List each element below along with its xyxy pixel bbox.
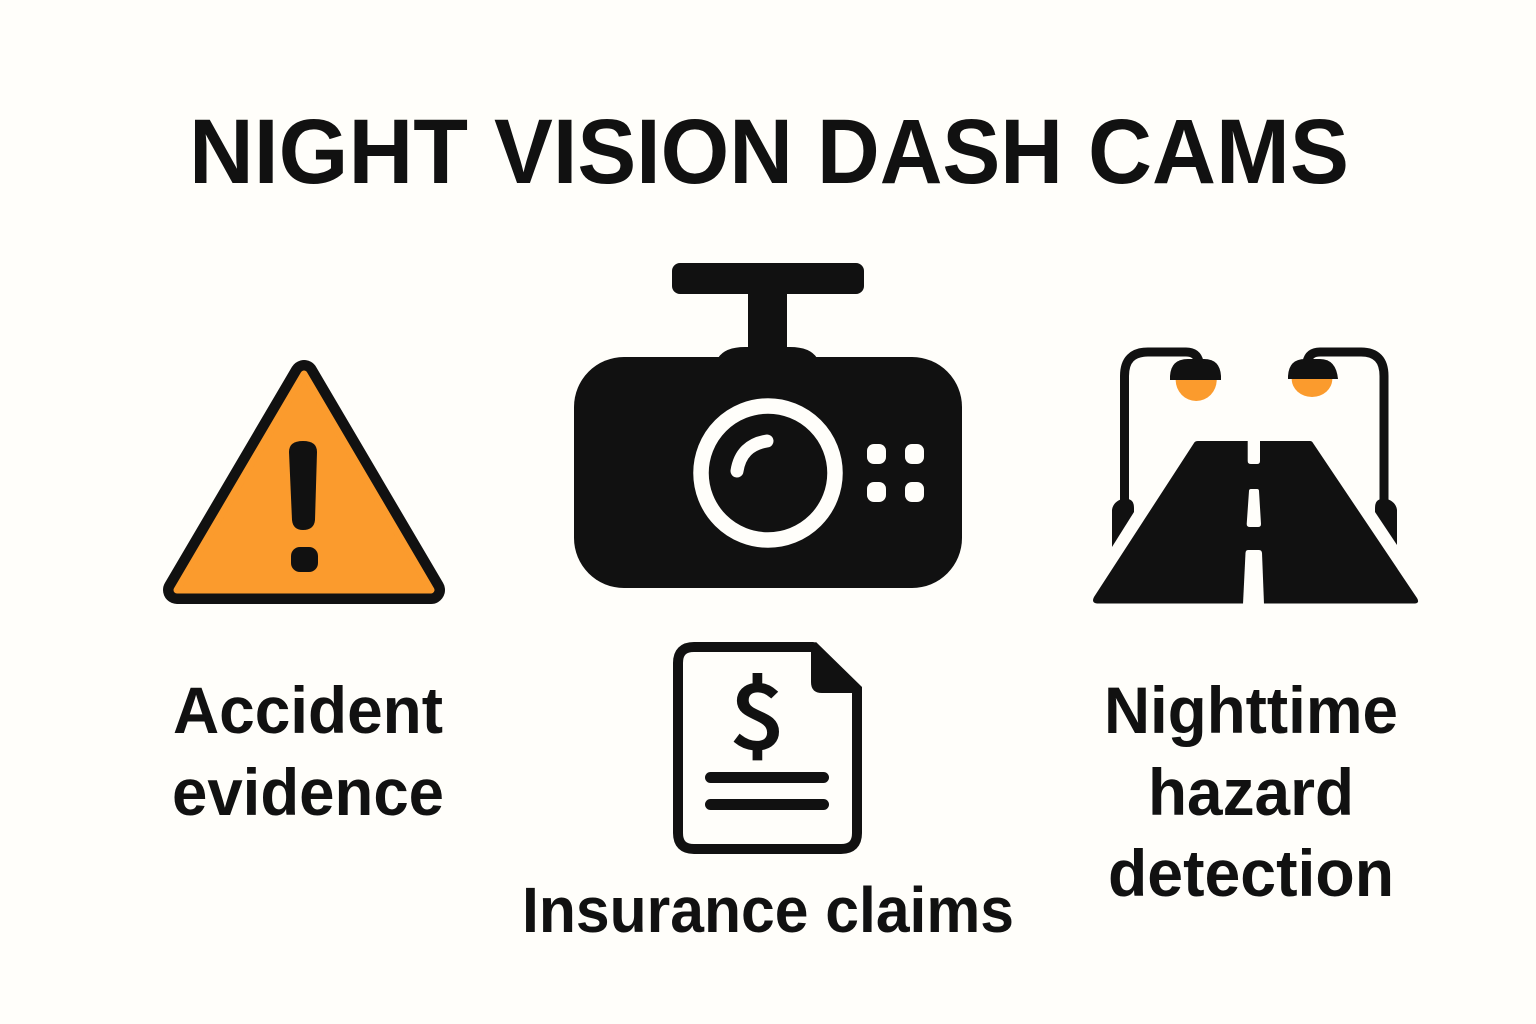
label: insurance claims: Insurance claims [522,874,1014,946]
title: DASH [817,101,1063,203]
icon: insurance document: $ [730,646,784,774]
title: NIGHT [189,101,468,203]
label: accident evidence: evidence [172,755,444,829]
title: VISION [494,101,793,203]
label: nighttime hazard detection: hazard [1148,755,1354,829]
icon: insurance document [678,642,862,849]
label: nighttime hazard detection [1104,673,1398,910]
road [1093,441,1418,604]
label: nighttime hazard detection: detection [1108,836,1394,910]
right street lamp [1288,352,1397,545]
title: CAMS [1088,101,1349,203]
icon: road with street lamps [1093,352,1418,604]
icon: dash cam [574,263,962,588]
left street lamp [1112,352,1221,547]
title [189,101,1349,203]
label: accident evidence [172,673,444,829]
label: nighttime hazard detection: Nighttime [1104,673,1398,747]
label: accident evidence: Accident [173,673,443,747]
icon: warning triangle [177,374,431,590]
